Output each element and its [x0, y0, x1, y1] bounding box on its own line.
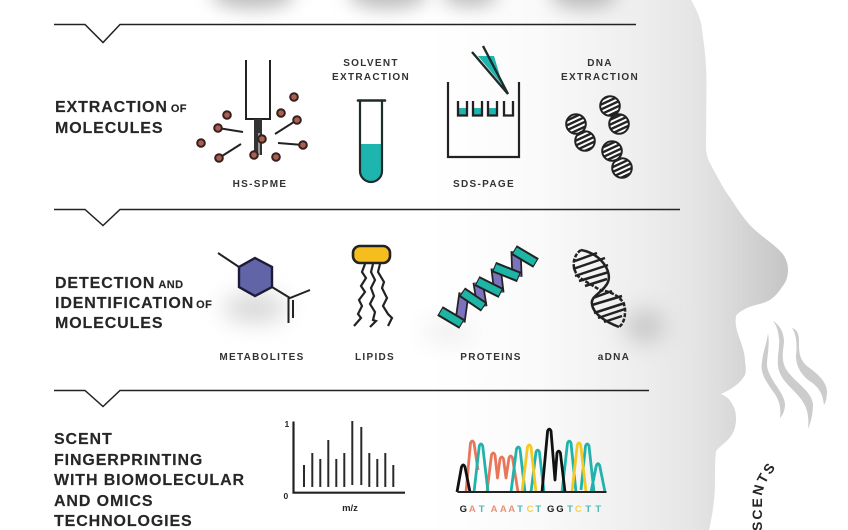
- chart: mass spectrum: 1: [284, 419, 290, 429]
- sequence letters: T: [567, 504, 573, 515]
- section heading: detection and identification of molecules: OF: [196, 299, 212, 311]
- label: DNA extraction: DNA: [587, 58, 613, 69]
- sequence letters: T: [535, 504, 541, 515]
- label: HS-SPME: HS-SPME: [233, 179, 287, 190]
- label: proteins: PROTEINS: [460, 352, 522, 363]
- label: aDNA: aDNA: [598, 352, 630, 363]
- label: solvent extraction: EXTRACTION: [332, 72, 410, 83]
- label: lipids: LIPIDS: [355, 352, 395, 363]
- section heading: scent fingerprinting: FINGERPRINTING: [54, 452, 203, 469]
- section heading: scent fingerprinting: SCENT: [54, 431, 113, 448]
- section heading: scent fingerprinting: TECHNOLOGIES: [54, 513, 193, 530]
- sequence letters: C: [527, 504, 534, 515]
- sequence letters: T: [595, 504, 601, 515]
- section heading: detection and identification of molecules: AND: [158, 279, 183, 291]
- label: solvent extraction: SOLVENT: [343, 58, 399, 69]
- sequence letters: A: [500, 504, 507, 515]
- sequence letters: G: [460, 504, 467, 515]
- icon: metabolite molecule: [218, 253, 310, 323]
- sequence letters: G: [547, 504, 554, 515]
- chart: mass spectrum: 0: [284, 491, 288, 501]
- icon: three small DNA strands: [566, 96, 632, 178]
- curved label: scents: SCENTS: [752, 464, 774, 530]
- face silhouette in profile: [400, 0, 788, 530]
- section heading: detection and identification of molecules: MOLECULES: [55, 315, 163, 332]
- chart: mass spectrum: [284, 419, 405, 514]
- sequence letters: T: [585, 504, 591, 515]
- sequence letters: A: [491, 504, 498, 515]
- section heading: extraction of molecules: MOLECULES: [55, 120, 163, 137]
- icon: test tube with solvent: [358, 100, 385, 182]
- icon: HS-SPME fibre and molecules: [197, 60, 307, 162]
- chart: mass spectrum: m/z: [342, 503, 358, 514]
- section heading: scent fingerprinting: WITH BIOMOLECULAR: [54, 472, 245, 489]
- chart: DNA chromatogram: [457, 429, 606, 492]
- sequence letters: T: [517, 504, 523, 515]
- label: DNA extraction: EXTRACTION: [561, 72, 639, 83]
- icon: lipid: [353, 246, 392, 327]
- sequence letters: T: [479, 504, 485, 515]
- section rule: detection: [54, 210, 680, 226]
- section heading: extraction of molecules: OF: [171, 103, 187, 115]
- icon: SDS-PAGE gel tank with pipette: [448, 46, 519, 157]
- sequence letters: A: [508, 504, 515, 515]
- section rule: fingerprinting: [54, 390, 649, 406]
- label: metabolites: METABOLITES: [219, 352, 305, 363]
- section heading: scent fingerprinting: AND OMICS: [54, 493, 153, 510]
- sequence letters: C: [575, 504, 582, 515]
- icon: protein helix: [440, 250, 536, 324]
- soft shadows: [211, 0, 665, 342]
- sequence letters: A: [469, 504, 476, 515]
- label: SDS-PAGE: SDS-PAGE: [453, 179, 515, 190]
- section heading: extraction of molecules: EXTRACTION: [55, 99, 168, 116]
- section heading: detection and identification of molecules: DETECTION: [55, 275, 155, 292]
- section heading: detection and identification of molecules: IDENTIFICATION: [55, 295, 194, 312]
- scent wisps: [762, 321, 827, 429]
- section rule: extraction: [54, 24, 636, 42]
- sequence letters: G: [556, 504, 564, 515]
- icon: aDNA double helix: [573, 250, 625, 327]
